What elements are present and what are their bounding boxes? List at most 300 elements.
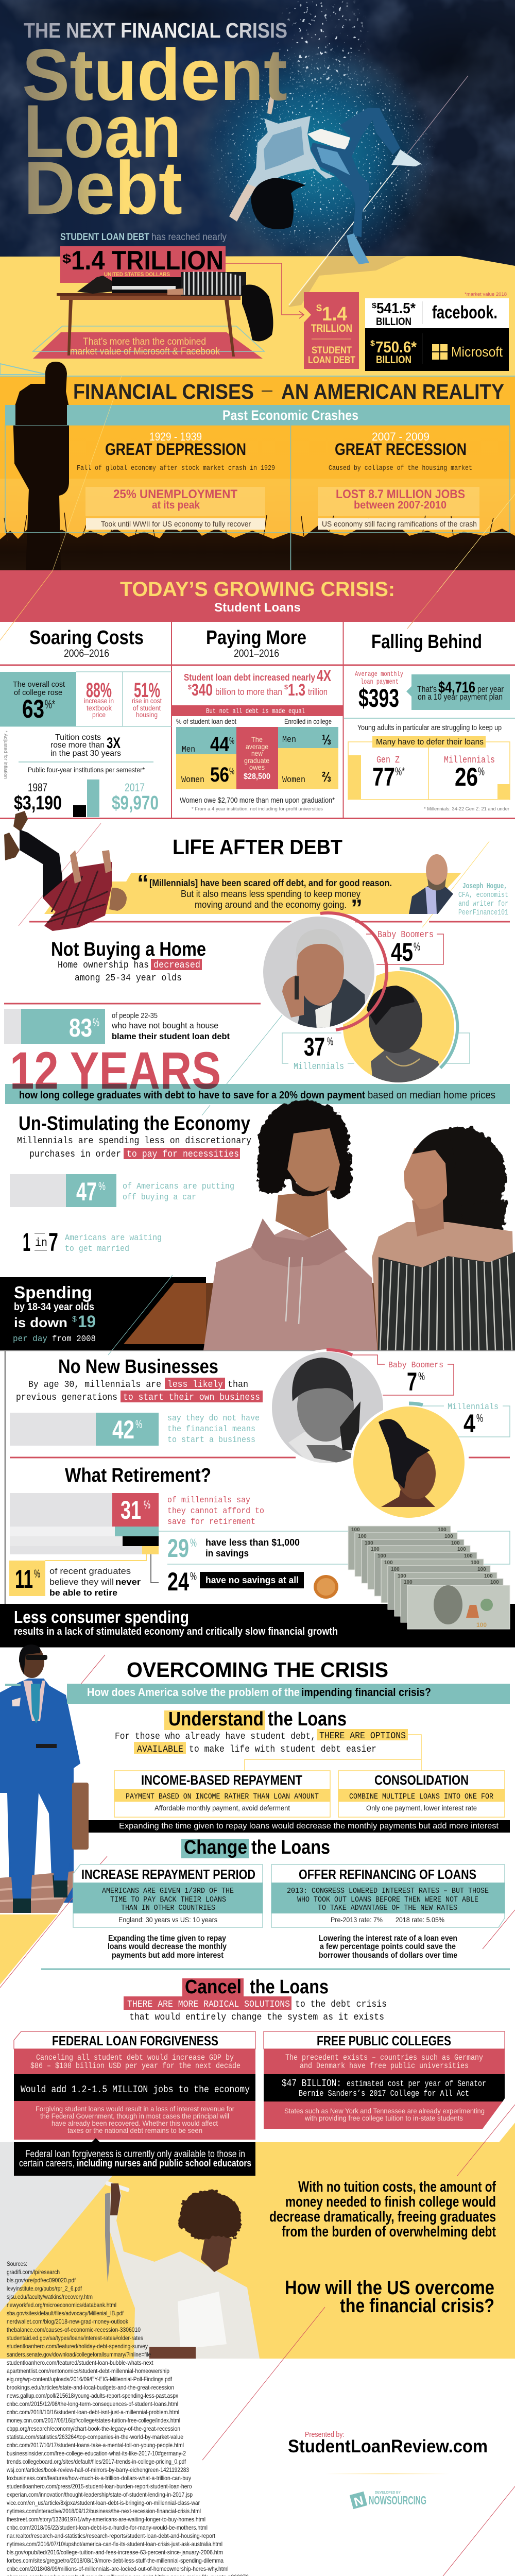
panel: great depression: [77, 430, 275, 530]
callout: millennials quote: [Millennials] have been scared off debt, and for good reason.: [149, 878, 392, 888]
panel: facebook value: [365, 298, 509, 328]
text: radical solutions: [124, 1996, 387, 2023]
panel: offer refinancing of loans: Pre-2013 rate: 7%: [331, 1916, 383, 1924]
panel: trillion comparison: [304, 292, 359, 369]
heading: understand the loans: [164, 1708, 347, 1730]
panel: soaring costs: $9,970: [112, 792, 159, 814]
panel: federal loan forgiveness: FEDERAL LOAN FORGIVENESS: [52, 2033, 218, 2048]
stat: 42 percent: to start a business: [167, 1435, 255, 1445]
panel: increase repayment period: AMERICANS ARE GIVEN 1/3RD OF THE: [102, 1887, 234, 1895]
chart: boomers vs millennials new businesses: Millennials: [448, 1402, 499, 1412]
stat: 42 percent: the financial means: [167, 1425, 255, 1434]
image: woman lying on table: market value of Microsoft & Facebook: [70, 346, 220, 357]
text: sources: sjsu.edu/faculty/watkins/recovery.htm: [7, 2293, 93, 2300]
panel: consolidation: [338, 1771, 505, 1817]
panel: paying more: %: [229, 766, 234, 776]
panel: free public colleges: Bernie Sanders’s 2017 College for All Act: [299, 2089, 469, 2099]
heading: no new businesses: previous generations: [16, 1393, 117, 1403]
panel: free public colleges: $47 BILLION:: [282, 2078, 341, 2089]
panel: federal loan forgiveness: the Federal Government, though in most cases the principal will: [40, 2112, 229, 2120]
text: sources: cnbc.com/2018/10/16/student-loan-debt-isnt-just-a-millennial-problem.html: [7, 2409, 179, 2416]
heading: financial crises: FINANCIAL CRISES: [73, 380, 254, 403]
stat: 47 percent: of Americans are putting: [123, 1182, 234, 1192]
image: hundred dollar bills: [348, 1526, 510, 1629]
panel: paying more: The: [251, 735, 263, 743]
panel: paying more: [171, 627, 343, 811]
text: sources: sba.gov/sites/default/files/advocacy/Millenial_IB.pdf: [7, 2310, 124, 2317]
image: young woman circle: [351, 1403, 467, 1520]
heading: no new businesses: to start their own business: [123, 1393, 260, 1403]
text: joseph hogue credit: [458, 882, 508, 917]
panel: falling behind: Millennials: [444, 755, 495, 766]
panel: falling behind: $4,716: [438, 679, 475, 696]
heading: financial crises: [73, 380, 504, 403]
panel: paying more: ⅓: [322, 732, 331, 748]
stat: 83 percent: %: [93, 1016, 99, 1029]
image: woman lying on table: That’s more than the combined: [83, 336, 206, 347]
stat: 24 percent: 24: [167, 1567, 189, 1596]
panel: spending band: is down: [14, 1315, 67, 1330]
panel: offer refinancing of loans: borrower thousands of dollars over time: [319, 1951, 457, 1960]
panel: soaring costs: housing: [136, 710, 158, 719]
panel: great recession: GREAT RECESSION: [335, 440, 467, 459]
image: hundred dollar bills: 100: [471, 1560, 479, 1566]
text: cannot afford to save: save for retirement: [167, 1517, 255, 1527]
panel: falling behind: Falling Behind: [371, 631, 482, 653]
panel: soaring costs: rose more than: [50, 741, 105, 750]
heading: change the loans: Change: [184, 1837, 247, 1858]
stat: 12 years: 12 YEARS: [10, 1041, 221, 1100]
title: the next financial crisis: THE NEXT FINANCIAL CRISIS: [24, 19, 287, 42]
text: sources: news.gallup.com/poll/215618/young-adults-report-spending-less-past.aspx: [7, 2392, 178, 2399]
panel: less consumer spending band: results in a lack of stimulated economy and critically slow financial growth: [14, 1626, 338, 1637]
text: sources: Sources:: [7, 2260, 27, 2267]
text: sources: sanders.senate.gov/download/collegeforallsummary/?inline=file: [7, 2351, 151, 2358]
connectors: retirement bars: [45, 1531, 510, 1583]
text: sources: cbpp.org/research/economy/chart-book-the-legacy-of-the-great-recession: [7, 2425, 180, 2432]
heading: not buying a home: Not Buying a Home: [51, 939, 206, 960]
heading: understand the loans: the Loans: [268, 1708, 347, 1730]
callout: 1.4 trillion box: $: [62, 252, 72, 266]
panel: offer refinancing of loans: WHO TOOK OUT LOANS BEFORE THEN WERE NOT ABLE: [297, 1895, 478, 1904]
panel: great depression: at its peak: [152, 499, 200, 511]
text: cannot afford to save: [167, 1496, 264, 1527]
stat: 12 years: [5, 1041, 510, 1104]
panel: falling behind: loan payment: [360, 678, 399, 686]
text: radical solutions: that would entirely change the system as it exists: [129, 2012, 384, 2023]
text: sources: eig.org/wp-content/uploads/2016/09/EY-EIG-Millennial-Poll-Findings.pdf: [7, 2376, 173, 2383]
text: sources: thebalance.com/causes-of-economic-recession-3306010: [7, 2326, 141, 2333]
heading: un-stimulating the economy: purchases in order: [29, 1149, 121, 1160]
heading: cancel the loans: [182, 1976, 329, 1998]
panel: increase repayment period: loans would decrease the monthly: [108, 1942, 227, 1951]
panel: microsoft value: BILLION: [376, 354, 411, 366]
panel: falling behind: per year: [477, 684, 504, 694]
chart: baby boomers vs millennials home ownership: 37: [304, 1032, 325, 1061]
panel: great recession: US economy still facing ramifications of the crash: [322, 520, 477, 529]
callout: federal loan forgiveness note: including nurses and public school educators: [77, 2158, 251, 2169]
text: sources: [6, 2260, 390, 2576]
image: hundred dollar bills: 100: [371, 1547, 380, 1552]
callout: 1.4 trillion box: 1.4 TRILLION: [71, 246, 224, 276]
text: options available: to make life with student debt easier: [189, 1744, 376, 1755]
panel: great depression: 25% UNEMPLOYMENT: [113, 487, 237, 501]
text: with no tuition costs: [269, 2179, 496, 2240]
text: sources: thestreet.com/story/13286197/1/why-americans-are-waiting-longer-to-buy-homes.html: [7, 2516, 205, 2523]
panel: federal loan forgiveness: $86 – $108 billion USD per year for the next decade: [30, 2061, 241, 2071]
heading: no new businesses: No New Businesses: [58, 1356, 218, 1378]
panel: free public colleges: with providing free college tuition to in-state students: [304, 2114, 463, 2122]
text: sources: wsj.com/articles/book-review-hall-of-mirrors-by-barry-eichengreen-1421192283: [6, 2466, 189, 2473]
text: options available: THERE ARE OPTIONS: [319, 1731, 406, 1741]
chart: baby boomers vs millennials home ownership: [261, 913, 470, 1087]
stat: 29 percent: 29: [167, 1534, 189, 1563]
note: market value: *market value 2018: [465, 292, 507, 297]
logo: nowsourcing: N: [352, 2494, 365, 2510]
heading: un-stimulating the economy: to pay for necessities: [127, 1149, 239, 1160]
panel: income-based repayment: INCOME-BASED REPAYMENT: [141, 1772, 302, 1788]
panel: soaring costs: 63: [22, 694, 44, 723]
callout: millennials quote: [19, 823, 489, 927]
image: woman lying on table: [33, 272, 273, 359]
panel: free public colleges: States such as New York and Tennessee are already experimenting: [284, 2107, 485, 2115]
panel: trillion comparison: 1.4: [322, 303, 347, 325]
stat: 24 percent: %: [190, 1570, 197, 1583]
stat: 24 percent: have no savings at all: [205, 1575, 299, 1585]
image: falling woman in water: [229, 95, 421, 264]
panel: offer refinancing of loans: [271, 1865, 515, 1960]
panel: paying more: 56: [210, 764, 229, 786]
panel: falling behind: 77: [372, 762, 395, 791]
chart: retirement savings stacked bars: 31: [121, 1496, 141, 1524]
panel: soaring costs: $3,190: [14, 792, 62, 814]
chart: baby boomers vs millennials home ownership: 45: [391, 938, 413, 967]
panel: paying more: graduate: [244, 756, 269, 765]
rule: [41, 1968, 510, 1970]
chart: boomers vs millennials new businesses: [269, 1349, 510, 1520]
stat: 1 in 7: 7: [48, 1228, 58, 1257]
panel: soaring costs: 1987: [28, 781, 47, 794]
panel: increase repayment period: THAN IN OTHER COUNTRIES: [121, 1904, 215, 1912]
panel: offer refinancing of loans: 2013: CONGRESS LOWERED INTEREST RATES – BUT THOSE: [287, 1887, 489, 1895]
stat: 42 percent: 42: [112, 1415, 134, 1444]
panel: great depression: 1929 - 1939: [149, 430, 202, 443]
panel: paying more: Men: [182, 745, 195, 755]
stat: 11 percent: %: [34, 1567, 40, 1580]
panel: spending band: 19: [78, 1312, 96, 1331]
image: brick stairs: [0, 1855, 74, 1988]
heading: change the loans: [181, 1837, 330, 1858]
panel: soaring costs: Public four-year institutions per semester*: [28, 766, 145, 774]
panel: great depression: Took until WWII for US economy to fully recover: [101, 520, 251, 529]
title: student loan debt: Student: [22, 34, 287, 116]
stat: 12 years: how long college graduates with debt to have to save for a 20% down payment: [19, 1090, 365, 1101]
text: sources: cnbc.com/2018/08/09/millions-of-millennials-are-locked-out-of-homeownership-heres-why.html: [7, 2565, 229, 2572]
text: sources: studentaid.ed.gov/sa/types/loans/interest-rates#older-rates: [7, 2334, 143, 2342]
text: student loan debt has reached nearly: has reached nearly: [151, 232, 227, 243]
image: hundred dollar bills: 100: [484, 1573, 493, 1579]
panel: paying more: $: [188, 683, 192, 691]
panel: facebook value: 541.5*: [376, 300, 416, 317]
panel: free public colleges: [264, 2031, 505, 2129]
stat: 47 percent: off buying a car: [123, 1193, 196, 1202]
text: sources: gradifi.com/lp/research: [7, 2268, 60, 2276]
panel: offer refinancing of loans: Lowering the interest rate of a loan even: [319, 1934, 457, 1943]
panel: past economic crashes: [5, 405, 510, 570]
panel: income-based repayment: PAYMENT BASED ON INCOME RATHER THAN LOAN AMOUNT: [126, 1792, 319, 1801]
stat: 11 percent: believe they will: [49, 1577, 114, 1587]
panel: increase repayment period: TIME TO PAY BACK THEIR LOANS: [110, 1895, 226, 1904]
stat: 47 percent: %: [98, 1180, 106, 1193]
text: sources: bls.gov/ore/pdf/ec090020.pdf: [7, 2277, 76, 2284]
panel: today's growing crisis banner: [0, 376, 515, 640]
image: hundred dollar bills: 100: [365, 1540, 373, 1546]
chart: boomers vs millennials new businesses: 4: [464, 1409, 475, 1438]
panel: falling behind: Many have to defer their loans: [376, 738, 484, 747]
chart: retirement savings stacked bars: [10, 1493, 159, 1554]
heading: no new businesses: less likely: [167, 1380, 223, 1390]
text: sources: nerdwallet.com/blog/2018-new-grad-money-outlook: [7, 2318, 129, 2325]
image: hundred dollar bills: 100: [464, 1553, 473, 1559]
panel: hero background: [0, 0, 515, 283]
panel: soaring costs: price: [92, 710, 106, 719]
heading: not buying a home: decreased: [153, 960, 200, 971]
panel: falling behind: [344, 631, 515, 811]
callout: federal loan forgiveness note: certain careers,: [19, 2158, 75, 2169]
panel: falling behind: 26: [455, 762, 478, 791]
stat: 42 percent: say they do not have: [167, 1414, 260, 1423]
image: baby boomer man circle: [261, 913, 387, 1030]
thin teal diagonal: [202, 1105, 210, 1115]
stat: 1 in 7: in: [35, 1236, 47, 1249]
text: sources: nar.realtor/research-and-statistics/research-reports/student-loan-debt-and-housing-report: [7, 2532, 216, 2539]
panel: paying more: Women: [181, 775, 204, 785]
panel: offer refinancing of loans: 2018 rate: 5.05%: [396, 1916, 444, 1924]
callout: federal loan forgiveness note: Federal loan forgiveness is currently only available to those in: [25, 2149, 245, 2160]
panel: falling behind: * Millennials: 34-22 Gen Z: 21 and under: [424, 806, 509, 811]
text: sources: experian.com/innovation/thought-leadership/state-of-student-lending-in-2017.jsp: [7, 2491, 193, 2498]
text: presented by: Presented by:: [305, 2430, 345, 2439]
panel: soaring costs: [0, 627, 171, 817]
panel: trillion comparison: LOAN DEBT: [308, 355, 355, 366]
panel: soaring costs: of student: [133, 704, 161, 712]
rule: [10, 1457, 510, 1458]
text: sources: studentloanhero.com/featured/holiday-debt-spending-survey: [7, 2343, 148, 2350]
callout: millennials quote: “: [137, 870, 149, 896]
panel: paying more: Enrolled in college: [284, 717, 332, 725]
text: sources: cnbc.com/2018/05/22/student-loan-debt-is-a-hurdle-for-many-would-be-mothers.html: [7, 2524, 208, 2531]
panel: paying more: % of student loan debt: [176, 717, 236, 725]
image: hundred dollar bills: 100: [351, 1527, 360, 1533]
image: silhouetted man: [13, 362, 69, 570]
stat: 11 percent: never: [115, 1577, 141, 1587]
panel: paying more: new: [251, 749, 263, 757]
stat: 1 in 7: [23, 1228, 162, 1257]
title: student loan debt: [22, 34, 287, 230]
panel: spending band: $: [72, 1315, 77, 1324]
panel: facebook value: facebook.: [432, 302, 497, 323]
panel: falling behind: %*: [395, 765, 405, 778]
panel: federal loan forgiveness: have already been recovered. Whether this would affect: [52, 2119, 218, 2127]
heading: change the loans: the Loans: [251, 1837, 330, 1858]
logo: nowsourcing: [350, 2491, 426, 2510]
image: hundred dollar bills: 100: [476, 1621, 487, 1629]
panel: soaring costs: 2006–2016: [64, 648, 109, 659]
panel: offer refinancing of loans: OFFER REFINANCING OF LOANS: [299, 1867, 476, 1882]
callout: millennials quote: ”: [351, 894, 363, 921]
text: radical solutions: to the debt crisis: [295, 1999, 387, 2010]
panel: spending band: from 2008: [52, 1334, 96, 1344]
image: joseph hogue portrait: [409, 854, 453, 914]
panel: paying more: Men: [282, 735, 296, 745]
connector: options to boxes: [245, 1735, 421, 1771]
logo: nowsourcing: DEVELOPED BY: [375, 2491, 401, 2495]
stat: 42 percent: [10, 1413, 260, 1446]
panel: consolidation: Only one payment, lower interest rate: [366, 1804, 477, 1812]
stat: 83 percent: blame their student loan debt: [112, 1031, 230, 1041]
image: older man circle: [269, 1349, 386, 1466]
heading: what retirement: What Retirement?: [65, 1465, 211, 1486]
panel: paying more: %: [229, 736, 234, 746]
stat: 29 percent: [167, 1534, 300, 1563]
panel: free public colleges: and Denmark have free public universities: [300, 2061, 469, 2071]
panel: soaring costs: %*: [45, 698, 55, 711]
panel: paying more: But not all debt is made equal: [206, 707, 305, 716]
heading: how will the us overcome: [285, 2277, 494, 2317]
panel: consolidation: CONSOLIDATION: [374, 1772, 469, 1788]
chart: boomers vs millennials new businesses: 7: [407, 1367, 417, 1396]
stat: 83 percent: of people 22-35: [112, 1011, 158, 1020]
text: presented by: StudentLoanReview.com: [288, 2436, 488, 2456]
text: sources: money.cnn.com/2017/05/16/pf/college/states-tuition-free-college/index.html: [7, 2417, 180, 2424]
text: sources: studentloanhero.com/press/2015-student-loan-burden-report-student-loan-hero: [7, 2483, 192, 2490]
panel: federal loan forgiveness: Would add 1.2-1.5 MILLION jobs to the economy: [21, 2084, 250, 2095]
text: sources: trends.collegeboard.org/sites/default/files/2017-trends-in-college-pricing_0.pdf: [7, 2458, 186, 2465]
panel: great recession: [318, 430, 479, 530]
image: hundred dollar bills: 100: [391, 1567, 400, 1572]
panel: increase repayment period: [73, 1856, 263, 1960]
panel: microsoft value: Microsoft: [451, 344, 503, 360]
panel: soaring costs: increase in: [84, 697, 114, 705]
panel: paying more: $: [284, 683, 288, 691]
image: hundred dollar bills: 100: [358, 1534, 367, 1539]
rule: [4, 1003, 261, 1005]
panel: less consumer spending band: [0, 1604, 515, 1648]
panel: three column dividers: [0, 622, 515, 819]
heading: not buying a home: among 25-34 year olds: [75, 973, 182, 984]
panel: income-based repayment: [114, 1771, 330, 1817]
banner: expanding the time: Expanding the time given to repay loans would decrease the monthly payments but add more interest: [119, 1822, 499, 1831]
stat: 1 in 7: to get married: [65, 1244, 129, 1254]
panel: paying more: 4X: [317, 667, 331, 685]
rule: [325, 2473, 449, 2474]
heading: cancel the loans: Cancel: [185, 1976, 242, 1998]
panel: great recession: LOST 8.7 MILLION JOBS: [336, 487, 465, 501]
heading: understand the loans: Understand: [168, 1708, 264, 1730]
panel: paying more: 2001–2016: [234, 648, 279, 659]
panel: paying more: 340: [192, 681, 213, 699]
stat: 83 percent: who have not bought a house: [111, 1021, 218, 1030]
panel: paying more: Women owe $2,700 more than men upon graduation*: [180, 796, 335, 805]
panel: soaring costs: The overall cost: [13, 680, 65, 689]
stat: 11 percent: [9, 1561, 141, 1598]
banner: expanding the time: [89, 1820, 510, 1833]
text: sources: businessinsider.com/free-college-education-what-its-like-2017-10#germany-2: [7, 2450, 186, 2457]
panel: great depression: GREAT DEPRESSION: [105, 440, 246, 459]
title: student loan debt: Debt: [24, 146, 182, 230]
panel: soaring costs: 2017: [125, 781, 145, 794]
panel: falling behind: Gen Z: [376, 755, 400, 766]
stat: 11 percent: of recent graduates: [49, 1566, 131, 1576]
heading: un-stimulating the economy: [17, 1113, 251, 1160]
panel: paying more: trillion: [308, 687, 328, 697]
stat: 29 percent: in savings: [205, 1548, 249, 1558]
panel: closing yellow background: [0, 2105, 515, 2576]
logo: nowsourcing: NOWSOURCING: [369, 2494, 426, 2507]
panel: paying more: 44: [210, 733, 230, 756]
panel: falling behind: %: [478, 765, 485, 778]
panel: free public colleges: FREE PUBLIC COLLEGES: [317, 2033, 451, 2048]
panel: soaring costs: Tuition costs: [55, 733, 101, 742]
heading: not buying a home: Home ownership has: [58, 960, 149, 971]
chart: baby boomers vs millennials home ownership: Millennials: [294, 1062, 344, 1072]
text: sources: nytimes.com/interactive/2018/09/12/business/the-next-recession-financial-crisis.html: [7, 2507, 201, 2515]
stat: 1 in 7: 1: [23, 1228, 30, 1257]
heading: no new businesses: [16, 1356, 263, 1403]
banner: how does america solve: impending financial crisis?: [301, 1686, 431, 1699]
panel: soaring costs: textbook: [87, 704, 112, 712]
panel: paying more: Student loan debt increased nearly: [184, 672, 315, 683]
panel: today's growing crisis banner: Student Loans: [214, 601, 301, 615]
heading: un-stimulating the economy: Millennials are spending less on discretionary: [17, 1136, 251, 1146]
panel: increase repayment period: Expanding the time given to repay: [108, 1934, 226, 1943]
panel: soaring costs: 3X: [107, 735, 121, 752]
panel: soaring costs: Soaring Costs: [29, 627, 144, 649]
panel: spending band: Spending: [14, 1283, 92, 1302]
panel: consolidation: COMBINE MULTIPLE LOANS INTO ONE FOR: [349, 1792, 493, 1801]
panel: falling behind: $393: [358, 684, 399, 713]
panel: federal loan forgiveness: [14, 2031, 255, 2140]
panel: paying more: Paying More: [206, 627, 306, 649]
text: sources: cnbc.com/2017/10/17/student-loans-take-a-mental-toll-on-young-people.html: [7, 2442, 184, 2449]
panel: today's growing crisis banner: TODAY’S GROWING CRISIS:: [120, 578, 395, 601]
panel: trillion comparison: $: [316, 303, 322, 314]
heading: un-stimulating the economy: Un-Stimulating the Economy: [19, 1113, 250, 1134]
heading: overcoming the crisis: OVERCOMING THE CRISIS: [127, 1658, 388, 1682]
heading: cancel the loans: the Loans: [250, 1976, 329, 1998]
chart: baby boomers vs millennials home ownership: %: [327, 1035, 333, 1048]
heading: not buying a home: [51, 939, 206, 984]
panel: facebook value: $: [372, 301, 377, 310]
chart: boomers vs millennials new businesses: Baby Boomers: [388, 1361, 443, 1370]
panel: soaring costs: 51%: [134, 679, 160, 702]
panel: less consumer spending band: Less consumer spending: [14, 1607, 189, 1626]
text: sources: bls.gov/opub/ted/2016/college-tuition-and-fees-increase-63-percent-since-january-2006.htm: [7, 2549, 223, 2556]
chart: baby boomers vs millennials home ownership: %: [414, 940, 420, 953]
panel: federal loan forgiveness: Canceling all student debt would increase GDP by: [36, 2053, 234, 2062]
text: sources: studentloanhero.com/featured/student-loan-bubble-whats-next: [7, 2359, 153, 2366]
text: cannot afford to save: of millennials say: [167, 1496, 250, 1505]
panel: spending band: per day: [13, 1334, 47, 1344]
panel: great recession: Caused by collapse of the housing market: [329, 464, 472, 472]
panel: falling behind: Average monthly: [355, 670, 403, 679]
image: hundred dollar bills: 100: [398, 1573, 406, 1579]
heading: no new businesses: By age 30, millennials are: [28, 1380, 161, 1390]
text: sources: cnbc.com/2015/12/08/the-long-term-consequences-of-student-loans.html: [7, 2400, 178, 2408]
text: cannot afford to save: they cannot afford to: [167, 1506, 264, 1516]
text: sources: newyorkfed.org/microeconomics/databank.html: [7, 2301, 116, 2309]
stat: 24 percent: [167, 1567, 304, 1596]
